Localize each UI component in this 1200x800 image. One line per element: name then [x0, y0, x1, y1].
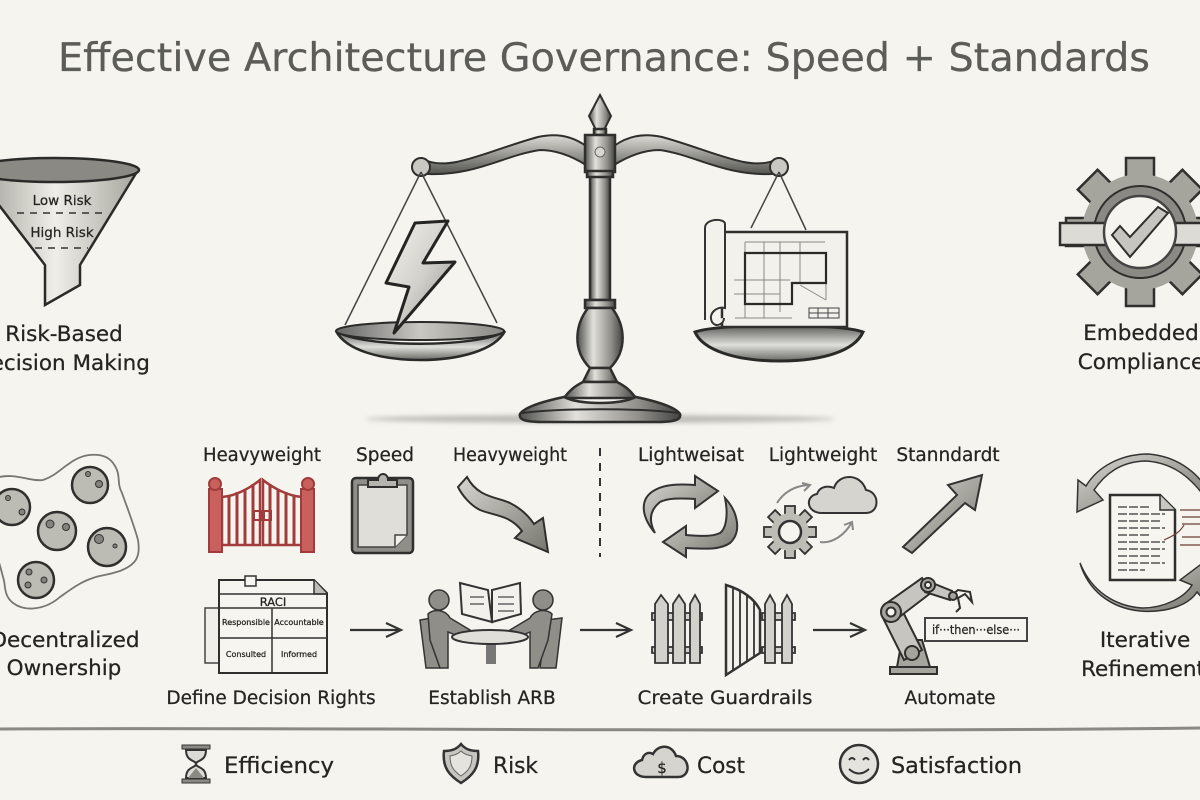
icon: RACI chart: Responsible — [222, 618, 270, 627]
comparison headings — [203, 445, 1000, 466]
icon: blueprint scroll — [705, 220, 847, 327]
icon: lightning bolt — [386, 221, 455, 333]
left pan — [336, 331, 505, 360]
code box: if···then···else··· — [932, 622, 1020, 637]
icon: RACI chart: RACI — [260, 595, 286, 609]
comparison headings: Stanndardt — [896, 445, 1000, 466]
metric: efficiency — [182, 745, 334, 783]
process labels: Establish ARB — [428, 688, 556, 709]
icon: guardrail fence and gate — [652, 585, 795, 675]
icon: RACI chart: Informed — [281, 650, 317, 659]
icon: up arrow — [903, 475, 982, 553]
metric: cost — [634, 747, 745, 779]
label: decentralized ownership: Ownership — [7, 656, 121, 681]
label: embedded compliance: Embedded — [1083, 321, 1199, 346]
icon: decentralized ownership cluster — [0, 455, 139, 609]
process labels: Automate — [905, 688, 995, 709]
icon: cycle arrows — [644, 476, 737, 557]
icon: risk funnel — [0, 158, 139, 305]
left pan strings — [345, 172, 497, 325]
icon: gear and cloud — [764, 477, 876, 558]
code box — [925, 618, 1027, 641]
metric: cost: $ — [657, 759, 667, 777]
divider — [599, 448, 601, 557]
label: risk-based decision making: Risk-Based — [5, 322, 123, 347]
comparison headings: Speed — [356, 445, 414, 466]
icon: RACI chart: Accountable — [274, 618, 324, 627]
icon: robot arm — [881, 578, 972, 674]
icon: architecture review board — [420, 583, 562, 668]
comparison headings: Lightweight — [769, 445, 877, 466]
icon: RACI chart — [205, 576, 327, 673]
comparison headings: Heavyweight — [203, 445, 321, 466]
icon: risk funnel: High Risk — [30, 225, 94, 241]
right pan — [695, 325, 863, 361]
process labels: Define Decision Rights — [166, 688, 376, 709]
divider — [0, 728, 1200, 730]
icon: clipboard — [352, 474, 413, 553]
arrow — [813, 623, 865, 637]
title: Effective Architecture Governance: Speed + Standards — [58, 36, 1150, 81]
metric: cost: Cost — [697, 754, 745, 779]
icon: red gate — [209, 478, 314, 552]
column — [520, 129, 680, 422]
comparison headings: Lightweisat — [638, 445, 744, 466]
arrow — [350, 623, 401, 637]
scale beam — [412, 135, 788, 176]
process labels — [166, 688, 995, 709]
metric: risk: Risk — [493, 754, 538, 779]
arrow — [580, 623, 631, 637]
finial — [589, 95, 611, 130]
metric: satisfaction — [840, 745, 1022, 783]
icon: down arrow — [458, 477, 548, 552]
central balance scale — [336, 95, 863, 423]
label: iterative refinement: Iterative — [1100, 628, 1190, 653]
icon: gear with check — [1060, 158, 1200, 306]
process labels: Create Guardrails — [638, 688, 812, 709]
metric: efficiency: Efficiency — [224, 754, 334, 779]
icon: risk funnel: Low Risk — [33, 193, 92, 209]
right pan strings — [751, 172, 806, 230]
metric: risk — [444, 744, 538, 783]
icon: iterative document — [1077, 454, 1200, 611]
metric: satisfaction: Satisfaction — [891, 754, 1022, 779]
comparison headings: Heavyweight — [453, 445, 567, 466]
icon: RACI chart: Consulted — [226, 650, 266, 659]
